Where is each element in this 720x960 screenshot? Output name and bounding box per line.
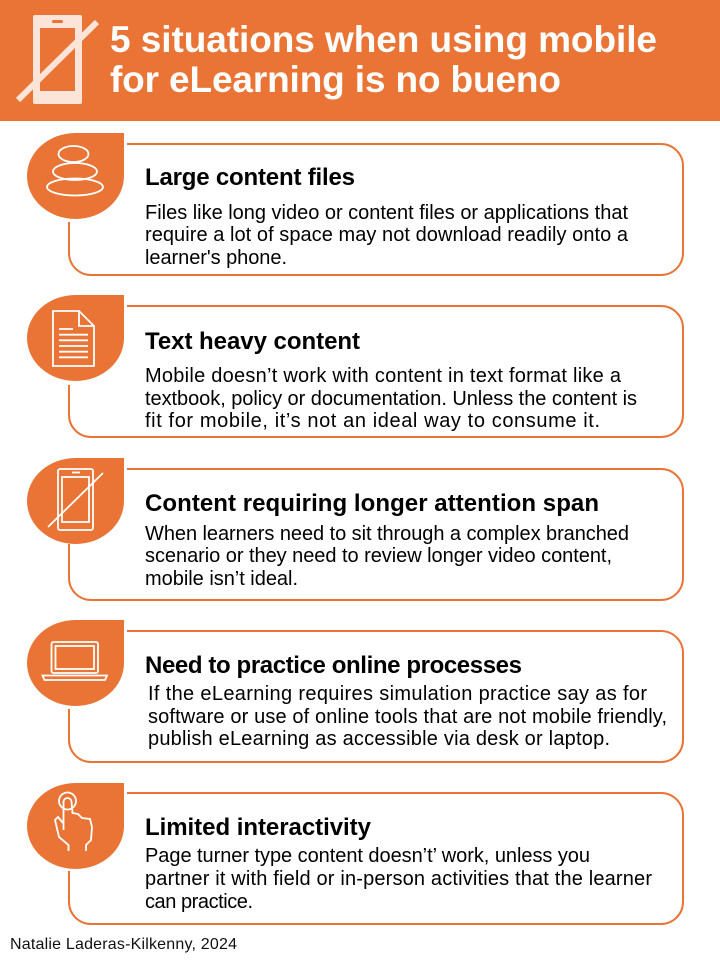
panel: text heavy content: [27, 295, 683, 437]
icon: laptop: [42, 642, 107, 680]
body text: scenario or they need to review longer video content,: [145, 545, 612, 567]
body text: can practice.: [145, 891, 253, 913]
body text: If the eLearning requires simulation practice say as for: [148, 683, 647, 705]
header banner: [0, 0, 720, 121]
heading: Text heavy content: [145, 328, 360, 355]
body text: [145, 523, 629, 590]
body text: When learners need to sit through a complex branched: [145, 523, 629, 545]
body text: Mobile doesn’t work with content in text format like a: [145, 365, 622, 387]
heading: Large content files: [145, 164, 355, 191]
icon: document: [53, 311, 94, 366]
panel: practice online processes: [27, 620, 683, 762]
body text: publish eLearning as accessible via desk or laptop.: [148, 728, 610, 750]
title: for eLearning is no bueno: [110, 59, 561, 100]
panel: limited interactivity: [27, 783, 683, 924]
panel: large content files: [27, 133, 683, 275]
body text: Files like long video or content files or applications that: [145, 202, 628, 224]
body text: textbook, policy or documentation. Unless the content is: [145, 388, 637, 410]
title: 5 situations when using mobile: [110, 19, 657, 60]
body text: fit for mobile, it’s not an ideal way to consume it.: [145, 410, 600, 432]
body text: mobile isn’t ideal.: [145, 568, 298, 590]
heading: Content requiring longer attention span: [145, 490, 599, 517]
title: [110, 19, 657, 100]
body text: software or use of online tools that are not mobile friendly,: [148, 706, 667, 728]
heading: Need to practice online processes: [145, 652, 522, 679]
body text: require a lot of space may not download readily onto a: [145, 224, 629, 246]
icon: crossed-out phone: [18, 15, 97, 104]
body text: [145, 202, 629, 269]
icon: crossed-out phone outline: [48, 469, 103, 530]
body text: [145, 365, 637, 432]
body text: Page turner type content doesn’t’ work, unless you: [145, 845, 590, 867]
heading: Limited interactivity: [145, 814, 372, 841]
icon: stacked stones: [47, 146, 103, 196]
icon: tapping hand: [55, 792, 92, 851]
body text: [145, 845, 652, 913]
credit line: Natalie Laderas-Kilkenny, 2024: [10, 936, 237, 953]
panel: longer attention span: [27, 458, 683, 600]
body text: partner it with field or in-person activities that the learner: [145, 868, 652, 890]
body text: learner's phone.: [145, 247, 287, 269]
body text: [148, 683, 667, 750]
